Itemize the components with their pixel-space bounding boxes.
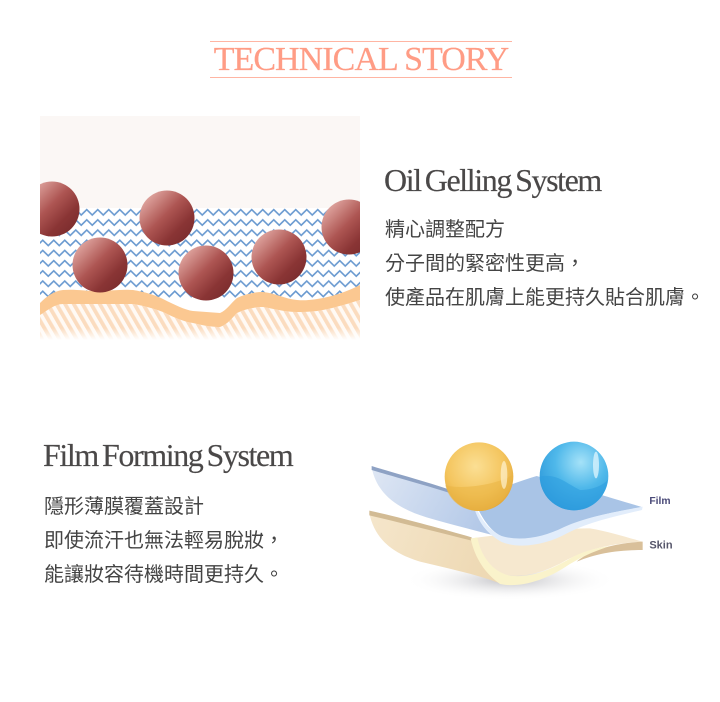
heading: film forming system: Film Forming System <box>43 437 292 473</box>
illustration: oil gelling particles on skin <box>40 116 360 338</box>
text: oil gelling description: 分子間的緊密性更高， <box>385 253 585 275</box>
text: film forming description: 即使流汗也無法輕易脫妝， <box>44 530 284 552</box>
text: oil gelling description: 精心調整配方 <box>385 219 505 241</box>
text: film forming description <box>44 496 284 586</box>
label: skin: Skin <box>649 539 673 551</box>
hatched skin layer <box>40 300 360 340</box>
label: film: Film <box>649 496 671 507</box>
orange skin band <box>40 285 360 327</box>
text: oil gelling description <box>385 219 705 309</box>
title: TECHNICAL STORY <box>214 41 508 78</box>
heading: oil gelling system: Oil Gelling System <box>384 162 601 198</box>
particles <box>24 182 376 300</box>
panel background <box>40 116 360 340</box>
text: film forming description: 隱形薄膜覆蓋設計 <box>44 496 204 518</box>
text: oil gelling description: 使產品在肌膚上能更持久貼合肌膚。 <box>385 287 705 309</box>
blue sphere <box>540 442 608 510</box>
water zigzag layer <box>40 208 360 318</box>
gold sphere <box>445 442 513 511</box>
bottom fade <box>40 328 360 340</box>
skin layer <box>369 511 643 585</box>
ground shadow <box>403 559 617 601</box>
film layer <box>372 466 643 546</box>
text: film forming description: 能讓妝容待機時間更持久。 <box>44 564 284 586</box>
illustration: film and skin layers <box>369 442 673 594</box>
